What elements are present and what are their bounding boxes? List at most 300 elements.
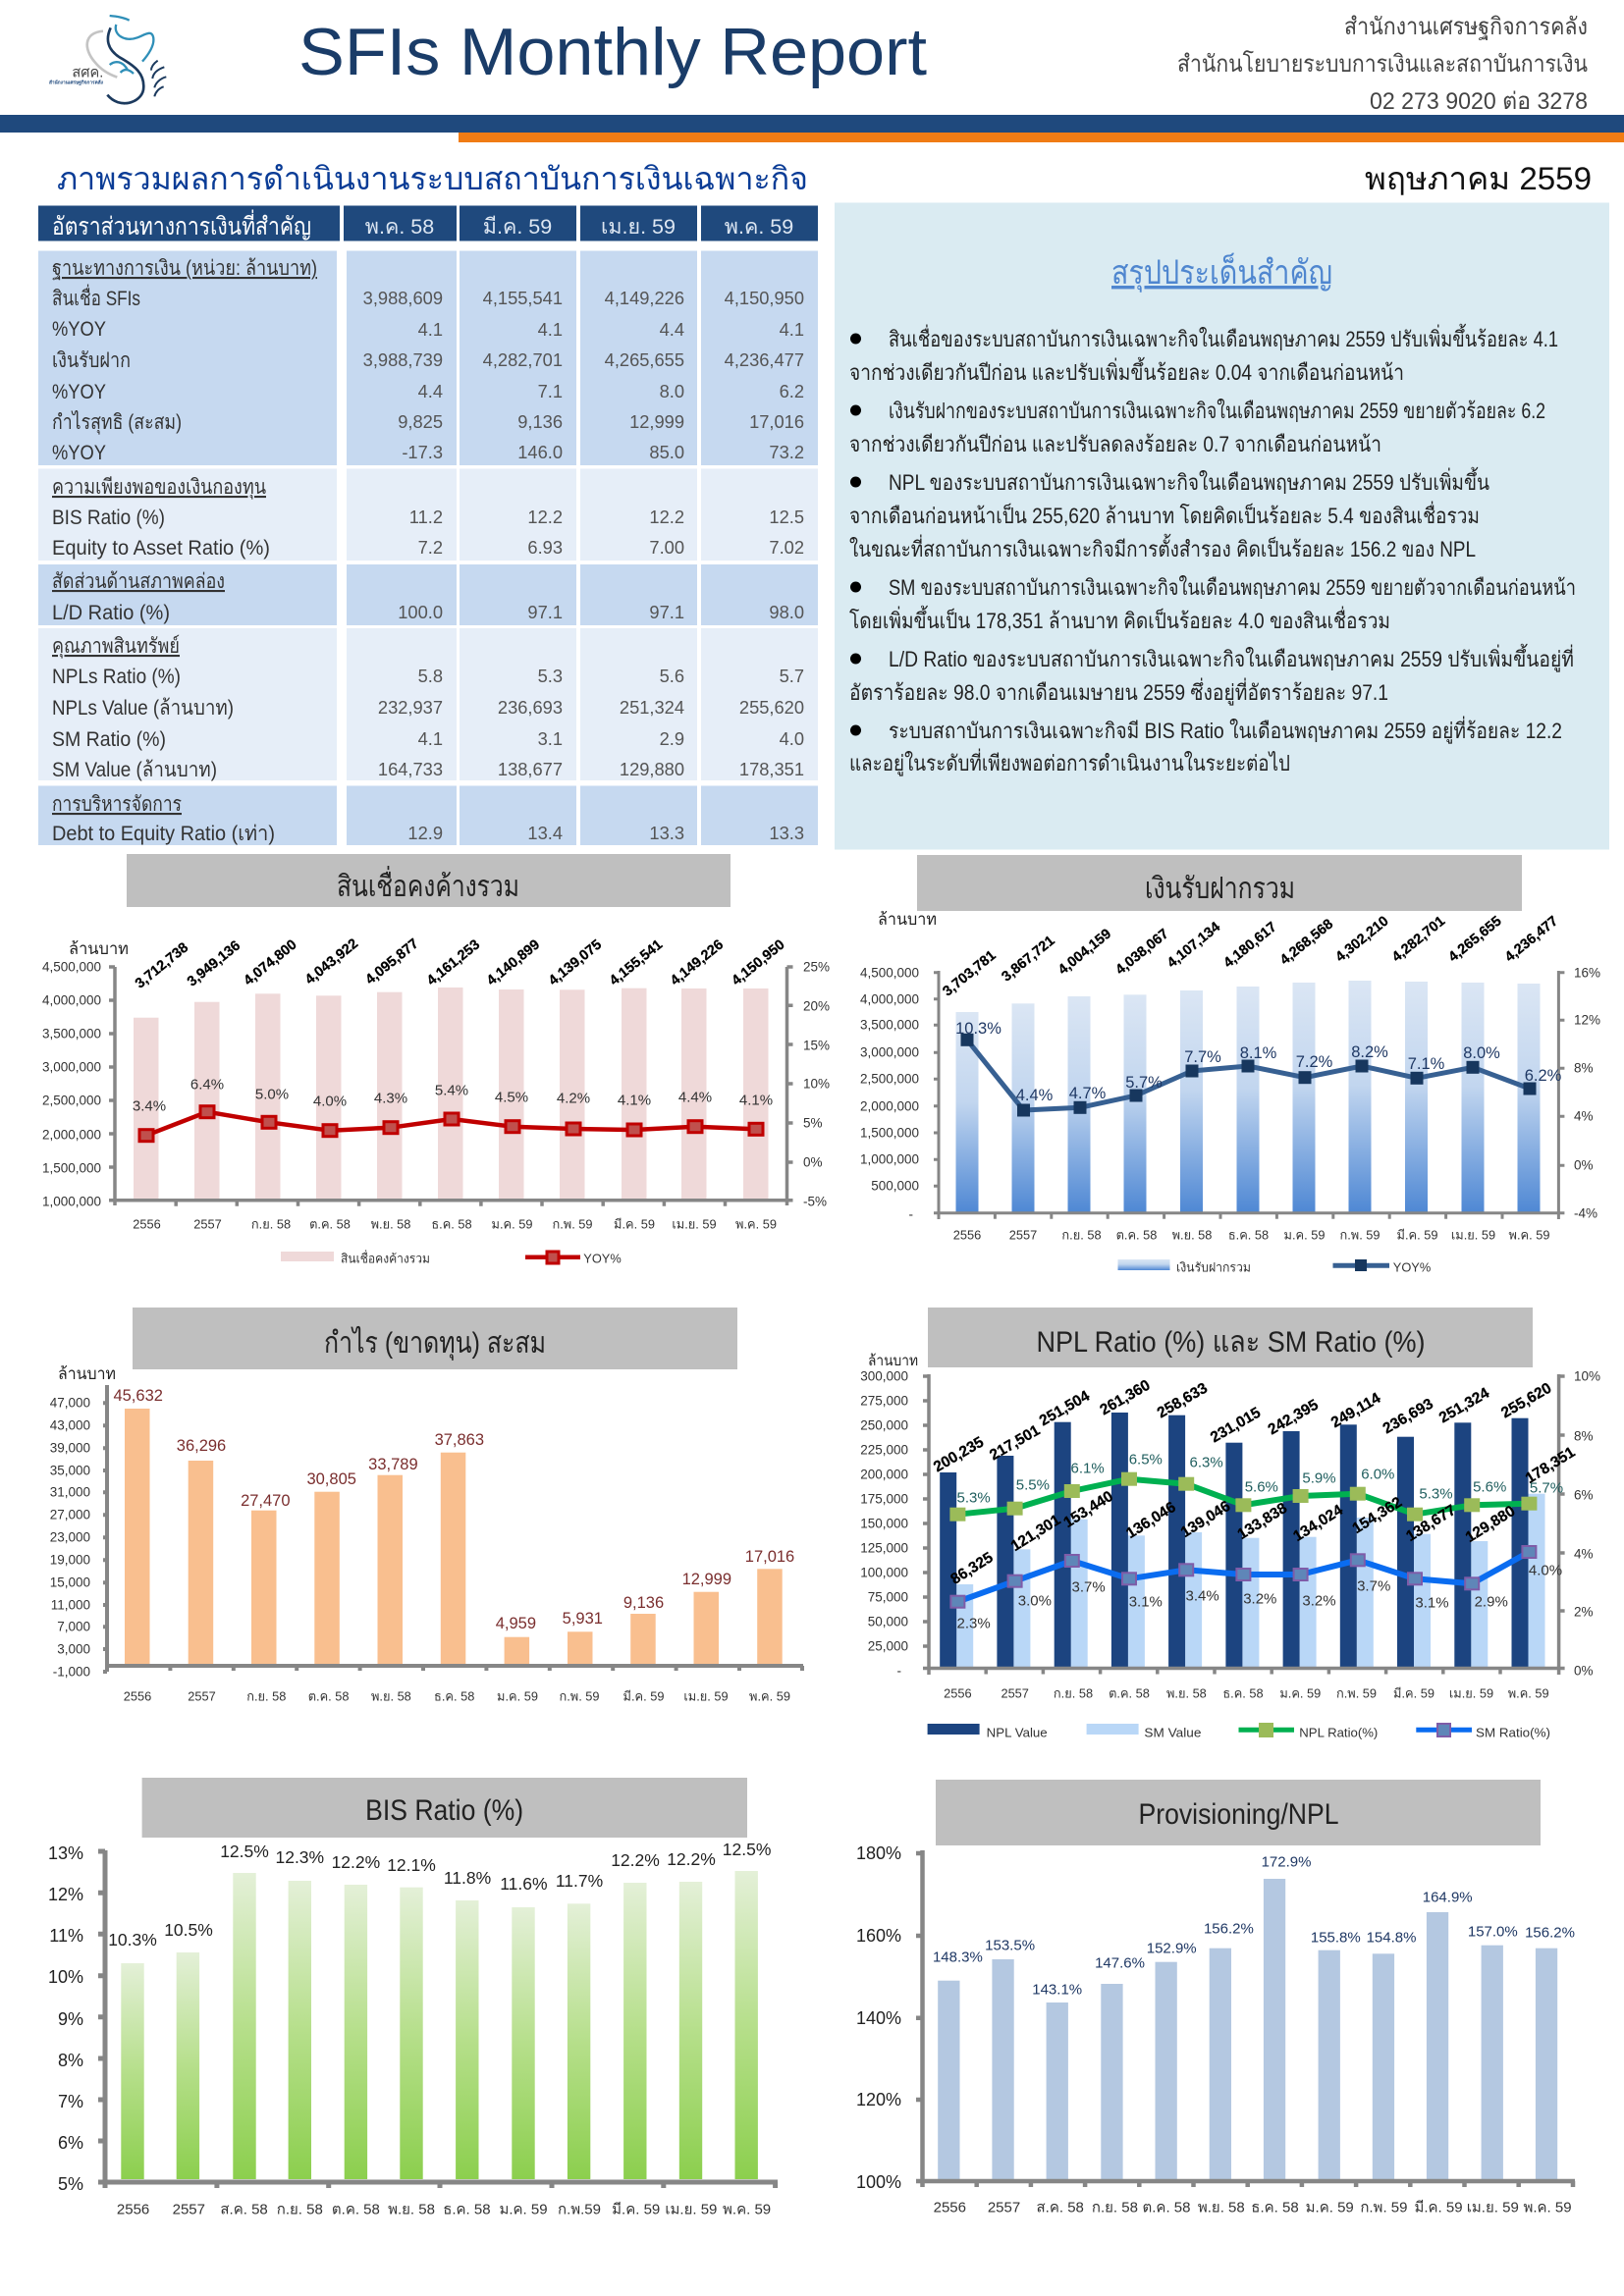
right axis labels	[803, 960, 830, 1209]
NPL ratio labels: 5.3%	[1419, 1486, 1453, 1502]
table group: financial position: 9,136	[517, 411, 563, 432]
table group: asset quality: NPLs Value (ล้านบาท)	[52, 697, 234, 720]
y axis labels: 47,000	[50, 1396, 90, 1410]
YOY data labels: 8.0%	[1463, 1044, 1500, 1062]
y axis labels: 180%	[856, 1843, 901, 1863]
organisation contact text: 02 273 9020 ต่อ 3278	[1370, 88, 1588, 115]
chart heading	[127, 854, 731, 907]
summary text lines: อัตราร้อยละ 98.0 จากเดือนเมษายน 2559 ซึ่งอยู่ที่อัตราร้อยละ 97.1	[849, 677, 1388, 706]
data labels: 156.2%	[1525, 1924, 1575, 1942]
summary text lines: จากช่วงเดียวกันปีก่อน และปรับเพิ่มขึ้นร้อยละ 0.04 จากเดือนก่อนหน้า	[849, 357, 1404, 385]
left axis labels: 500,000	[871, 1178, 919, 1194]
x axis labels: พ.ย. 58	[371, 1217, 410, 1231]
x axis labels: พ.ค. 59	[749, 1688, 790, 1704]
left axis labels: 150,000	[860, 1516, 908, 1531]
y axis labels: 3,000	[57, 1641, 90, 1657]
x axis labels: 2557	[1009, 1227, 1037, 1243]
data labels: 12.1%	[387, 1855, 436, 1875]
y axis labels	[50, 1396, 90, 1679]
axes	[103, 1385, 803, 1672]
deposit value labels: 3,867,721	[999, 933, 1058, 986]
y axis labels: 31,000	[50, 1484, 90, 1500]
data labels: 12.5%	[723, 1840, 771, 1859]
y axis labels: 9%	[58, 2009, 83, 2029]
SM ratio labels: 3.2%	[1243, 1590, 1276, 1608]
deposit value labels	[940, 913, 1561, 1000]
table group: financial position: กำไรสุทธิ (สะสม)	[52, 410, 182, 435]
right axis labels: 16%	[1574, 966, 1600, 980]
x axis labels: เม.ย. 59	[1467, 2199, 1519, 2216]
table group: financial position: %YOY	[52, 442, 106, 464]
table header row: พ.ค. 59	[725, 215, 793, 239]
data labels: 156.2%	[1204, 1920, 1254, 1938]
table group: asset quality: 4.0	[780, 728, 804, 749]
table group: asset quality: SM Ratio (%)	[52, 728, 166, 751]
table group: financial position: 6.2	[780, 381, 804, 401]
table group: asset quality: คุณภาพสินทรัพย์	[52, 634, 180, 659]
y axis labels: 7,000	[57, 1620, 90, 1633]
data labels: 148.3%	[933, 1949, 983, 1965]
x axis labels: พ.ค. 59	[1508, 1686, 1549, 1700]
deposit value labels: 4,268,568	[1277, 916, 1336, 969]
header bars	[0, 115, 1624, 142]
table header row: พ.ค. 58	[365, 215, 434, 239]
data labels: 33,789	[368, 1456, 418, 1473]
summary text lines: จากช่วงเดียวกันปีก่อน และปรับลดลงร้อยละ 0.7 จากเดือนก่อนหน้า	[849, 432, 1381, 456]
x axis labels: พ.ค. 59	[1509, 1227, 1549, 1243]
YOY data labels: 5.7%	[1125, 1074, 1163, 1092]
table group: asset quality	[38, 628, 818, 781]
SM value labels: 139,046	[1178, 1498, 1234, 1541]
table group: financial position: -17.3	[402, 442, 443, 462]
right axis labels: 25%	[803, 960, 830, 974]
left axis labels: 250,000	[860, 1417, 908, 1433]
x axis labels: พ.ย. 58	[1172, 1227, 1212, 1243]
table group: financial position: 12,999	[629, 411, 684, 432]
NPL value labels: 251,504	[1037, 1387, 1093, 1429]
loan value labels: 4,043,922	[302, 935, 361, 988]
NPL ratio labels: 6.1%	[1070, 1461, 1105, 1476]
table header row: มี.ค. 59	[483, 215, 552, 239]
table group: liquidity	[38, 564, 818, 625]
table group: liquidity: L/D Ratio (%)	[52, 602, 170, 624]
table header row	[38, 206, 818, 241]
table group: financial position: 4,282,701	[483, 349, 563, 370]
legend: SM Value	[1144, 1726, 1201, 1739]
panel: total deposits chart	[860, 855, 1600, 1274]
data labels: 11.7%	[556, 1871, 603, 1891]
right axis labels: -5%	[803, 1194, 827, 1209]
x axis labels: ธ.ค. 58	[1228, 1227, 1269, 1243]
table group: asset quality: 5.3	[538, 666, 563, 686]
data labels: 152.9%	[1147, 1940, 1197, 1957]
summary text lines: โดยเพิ่มขึ้นเป็น 178,351 ล้านบาท คิดเป็นร้อยละ 4.0 ของสินเชื่อรวม	[849, 606, 1390, 633]
data labels: 12.2%	[667, 1849, 716, 1869]
SM ratio labels: 3.1%	[1129, 1594, 1163, 1610]
left axis labels: 175,000	[860, 1492, 908, 1506]
axes	[98, 1850, 778, 2188]
table group: financial position: 4,149,226	[605, 288, 684, 308]
table group: financial position: 4.1	[418, 319, 443, 340]
NPL value labels: 200,235	[931, 1433, 987, 1475]
SM value labels: 153,440	[1060, 1488, 1116, 1531]
right axis labels: 8%	[1574, 1060, 1594, 1076]
y axis labels: 23,000	[50, 1529, 90, 1545]
x axis labels: ต.ค. 58	[332, 2201, 380, 2218]
right axis labels: 10%	[1574, 1368, 1600, 1384]
table group: financial position: 146.0	[517, 442, 563, 462]
table group: capital adequacy: 7.02	[769, 537, 804, 558]
left axis labels: 200,000	[860, 1467, 908, 1482]
SM ratio labels: 3.7%	[1357, 1578, 1390, 1594]
table group: liquidity: 97.1	[527, 602, 563, 622]
table group: financial position: 4.4	[418, 381, 443, 401]
table group: financial position: 7.1	[538, 381, 563, 401]
table group: asset quality: 164,733	[378, 759, 443, 779]
y axis labels: 13%	[48, 1843, 83, 1863]
y axis labels: 27,000	[50, 1508, 90, 1522]
data labels: 37,863	[435, 1431, 484, 1449]
left axis labels: 4,500,000	[42, 960, 101, 974]
table group: asset quality: 5.8	[418, 666, 443, 686]
table group: financial position: 3,988,739	[363, 349, 443, 370]
chart heading	[142, 1778, 747, 1838]
x axis labels: ก.ย. 58	[277, 2201, 323, 2218]
table group: asset quality: 4.1	[418, 728, 443, 749]
y axis labels: -1,000	[53, 1665, 90, 1679]
left axis labels: 25,000	[868, 1639, 908, 1653]
SM value labels: 133,838	[1235, 1500, 1290, 1543]
x axis labels: ธ.ค. 58	[1251, 2199, 1299, 2216]
YOY data labels: 4.5%	[495, 1090, 528, 1105]
left axis labels: -	[897, 1663, 901, 1679]
x axis labels: พ.ค. 59	[723, 2201, 771, 2218]
SM value labels: 134,024	[1290, 1502, 1346, 1545]
deposit value labels: 3,703,781	[940, 947, 1000, 1000]
YOY data labels: 4.2%	[557, 1090, 590, 1107]
SM value labels: 138,677	[1403, 1502, 1459, 1545]
YOY data labels	[133, 1076, 773, 1115]
NPL ratio labels: 5.9%	[1302, 1470, 1336, 1486]
x axis labels: ต.ค. 58	[308, 1688, 349, 1704]
right axis labels: 8%	[1574, 1429, 1594, 1443]
SM ratio line	[950, 1546, 1536, 1608]
deposit value labels: 4,038,067	[1112, 926, 1172, 979]
bars	[956, 981, 1540, 1212]
data labels: 27,470	[241, 1492, 291, 1510]
right axis labels	[1574, 1368, 1600, 1679]
YOY data labels: 4.4%	[1016, 1087, 1054, 1104]
loan value labels: 3,712,738	[133, 939, 191, 992]
data labels: 45,632	[113, 1387, 163, 1405]
table group: financial position	[38, 251, 818, 465]
SM ratio labels: 3.4%	[1185, 1588, 1219, 1604]
table group: financial position: 4,150,950	[725, 288, 804, 308]
x axis labels: ก.พ. 59	[559, 1688, 600, 1704]
left axis labels: 2,000,000	[860, 1099, 919, 1113]
table group: financial position: 85.0	[649, 442, 684, 462]
x axis labels: เม.ย. 59	[1451, 1227, 1495, 1243]
table group: capital adequacy: Equity to Asset Ratio (%)	[52, 537, 270, 560]
x axis labels: 2556	[133, 1217, 161, 1231]
unit label: ล้านบาท	[69, 939, 129, 958]
x axis labels	[133, 1217, 777, 1231]
legend	[281, 1251, 622, 1266]
y axis labels: 100%	[856, 2172, 901, 2192]
y axis labels: 6%	[58, 2133, 83, 2153]
summary text lines: ในขณะที่สถาบันการเงินเฉพาะกิจมีการตั้งสำรอง คิดเป็นร้อยละ 156.2 ของ NPL	[849, 534, 1476, 561]
y axis labels: 11,000	[51, 1598, 90, 1612]
deposit value labels: 4,180,617	[1220, 919, 1280, 972]
x axis labels: ก.ย. 58	[1054, 1686, 1093, 1700]
left axis labels: 4,000,000	[42, 993, 101, 1007]
x axis labels: เม.ย. 59	[672, 1217, 717, 1231]
table group: financial position: %YOY	[52, 381, 106, 403]
NPL ratio labels: 6.5%	[1129, 1451, 1163, 1468]
y axis labels	[48, 1843, 83, 2194]
NPL value labels: 255,620	[1498, 1380, 1554, 1421]
x axis labels: ธ.ค. 58	[443, 2201, 491, 2218]
table group: capital adequacy: 7.2	[418, 537, 443, 558]
x axis labels: มี.ค. 59	[623, 1688, 664, 1704]
light SM bars	[956, 1494, 1545, 1667]
right axis labels: 15%	[803, 1039, 830, 1052]
panel: key points summary	[835, 202, 1609, 850]
right axis labels: 4%	[1574, 1547, 1594, 1561]
table header row: เม.ย. 59	[601, 215, 676, 239]
table group: asset quality: NPLs Ratio (%)	[52, 666, 181, 688]
SM value labels	[947, 1444, 1579, 1588]
x axis labels: ธ.ค. 58	[1222, 1686, 1264, 1700]
YOY line	[139, 1106, 763, 1142]
x axis labels: ธ.ค. 58	[434, 1688, 474, 1704]
YOY data labels: 3.4%	[133, 1097, 166, 1115]
YOY data labels: 8.1%	[1240, 1044, 1277, 1062]
YOY data labels	[955, 1020, 1562, 1104]
x axis labels: ม.ค. 59	[1306, 2199, 1354, 2216]
x axis labels: 2557	[173, 2201, 205, 2218]
deposit value labels: 4,282,701	[1389, 913, 1448, 966]
left axis labels: 2,500,000	[42, 1094, 101, 1107]
table group: capital adequacy	[38, 469, 818, 561]
data labels: 143.1%	[1032, 1981, 1082, 1999]
left axis labels: 275,000	[860, 1394, 908, 1408]
y axis labels: 160%	[856, 1926, 901, 1946]
SM value labels: 86,325	[947, 1549, 997, 1588]
SM value labels: 121,301	[1008, 1512, 1064, 1555]
x axis labels: 2556	[117, 2201, 149, 2218]
legend: SM Ratio(%)	[1476, 1726, 1550, 1739]
right axis labels: 5%	[803, 1115, 823, 1131]
left axis labels: 1,000,000	[42, 1194, 101, 1209]
x axis labels: พ.ย. 58	[388, 2201, 435, 2218]
table group: management: 13.4	[527, 823, 563, 843]
organisation contact text	[1177, 14, 1588, 115]
x axis labels: พ.ย. 58	[1198, 2199, 1245, 2216]
chart heading	[928, 1308, 1533, 1367]
table group: asset quality: 232,937	[378, 697, 443, 718]
unit label: ล้านบาท	[878, 910, 937, 929]
loan value labels: 4,074,800	[241, 936, 300, 989]
loan value labels: 4,150,950	[729, 936, 788, 989]
table group: financial position: 4,155,541	[483, 288, 563, 308]
table group: financial position: สินเชื่อ SFIs	[52, 284, 140, 310]
right axis labels: 12%	[1574, 1013, 1600, 1027]
chart heading	[936, 1780, 1541, 1845]
data labels	[933, 1853, 1575, 1999]
x axis labels: ส.ค. 58	[1037, 2199, 1084, 2216]
summary text lines	[849, 324, 1576, 776]
month label: พฤษภาคม 2559	[1365, 161, 1592, 196]
NPL ratio labels: 6.3%	[1189, 1455, 1223, 1470]
x axis labels: ก.ย. 58	[251, 1217, 291, 1231]
table group: capital adequacy: 12.2	[649, 507, 684, 527]
loan value labels: 4,161,253	[424, 936, 483, 989]
table group: financial position: 73.2	[769, 442, 804, 462]
x axis labels	[934, 2199, 1572, 2216]
legend: NPL Ratio(%)	[1299, 1726, 1378, 1739]
x axis labels: เม.ย. 59	[665, 2201, 717, 2218]
left axis labels: 1,500,000	[42, 1160, 101, 1176]
bars	[134, 988, 768, 1201]
x axis labels: ก.พ. 59	[1336, 1686, 1377, 1700]
x axis labels: ก.พ. 59	[552, 1217, 593, 1231]
y axis labels: 120%	[856, 2090, 901, 2109]
chart heading: Provisioning/NPL	[1139, 1798, 1339, 1831]
left axis labels: 1,500,000	[860, 1125, 919, 1141]
y axis labels: 7%	[58, 2092, 83, 2111]
left axis labels: 1,000,000	[860, 1152, 919, 1166]
y axis labels: 10%	[48, 1967, 83, 1987]
left axis labels: 225,000	[860, 1443, 908, 1457]
chart heading	[133, 1308, 737, 1369]
SM ratio labels: 3.0%	[1018, 1592, 1052, 1610]
NPL value labels: 242,395	[1266, 1396, 1322, 1438]
table group: financial position: ฐานะทางการเงิน (หน่วย: ล้านบาท)	[52, 257, 317, 280]
x axis labels: มี.ค. 59	[1393, 1686, 1435, 1700]
x axis labels	[117, 2201, 771, 2218]
x axis labels: ส.ค. 58	[220, 2201, 268, 2218]
x axis labels	[953, 1227, 1549, 1243]
right axis labels: 0%	[1574, 1158, 1594, 1172]
table group: financial position: 3,988,609	[363, 288, 443, 308]
right axis labels: -4%	[1574, 1205, 1597, 1221]
deposit value labels: 4,236,477	[1502, 913, 1561, 966]
table: key financial ratios	[38, 206, 818, 845]
SM ratio labels: 2.3%	[956, 1616, 991, 1631]
panel: outstanding loans chart	[42, 854, 830, 1266]
y axis labels: 140%	[856, 2008, 901, 2028]
axes	[916, 1850, 1575, 2187]
SM ratio labels: 3.7%	[1071, 1578, 1106, 1596]
dark NPL bars	[940, 1413, 1528, 1667]
x axis labels	[944, 1686, 1549, 1700]
x axis labels: 2556	[124, 1688, 151, 1704]
data labels: 12,999	[682, 1571, 731, 1588]
panel: NPL and SM ratio chart	[860, 1308, 1600, 1739]
YOY data labels: 7.1%	[1408, 1055, 1445, 1073]
axes	[109, 967, 793, 1206]
left axis labels	[860, 966, 919, 1221]
SM ratio labels	[956, 1563, 1562, 1631]
logo: สำนักงานเศรษฐกิจการคลัง	[49, 79, 104, 85]
data labels: 12.2%	[332, 1852, 380, 1872]
data labels: 9,136	[623, 1594, 664, 1612]
table group: capital adequacy: 11.2	[409, 507, 443, 527]
x axis labels: 2557	[988, 2199, 1020, 2216]
x axis labels: พ.ย. 58	[371, 1688, 411, 1704]
data labels: 10.5%	[164, 1920, 213, 1940]
chart heading: กำไร (ขาดทุน) สะสม	[324, 1325, 546, 1362]
table group: asset quality: 178,351	[739, 759, 804, 779]
table group: management: 13.3	[649, 823, 684, 843]
summary heading: สรุปประเด็นสำคัญ	[1111, 252, 1332, 293]
bullets	[850, 334, 861, 736]
table group: capital adequacy: BIS Ratio (%)	[52, 507, 165, 529]
YOY data labels: 4.1%	[739, 1092, 773, 1109]
table group: liquidity: 97.1	[649, 602, 684, 622]
NPL value labels: 217,501	[987, 1421, 1044, 1464]
SM ratio labels: 3.1%	[1415, 1594, 1449, 1612]
table group: liquidity: 98.0	[769, 602, 804, 622]
data labels: 147.6%	[1095, 1955, 1145, 1971]
table group: asset quality: 3.1	[538, 728, 563, 749]
table group: capital adequacy: 12.2	[527, 507, 563, 527]
table group: liquidity: สัดส่วนด้านสภาพคล่อง	[52, 570, 225, 593]
logo: สศค.	[72, 65, 103, 81]
NPL value labels: 236,693	[1380, 1395, 1436, 1437]
SM ratio labels: 3.2%	[1302, 1592, 1336, 1610]
left axis labels: 4,500,000	[860, 966, 919, 980]
y axis labels: 12%	[48, 1885, 83, 1904]
right axis labels: 20%	[803, 999, 830, 1013]
NPL value labels: 249,114	[1328, 1390, 1383, 1431]
table group: financial position: 17,016	[749, 411, 804, 432]
left axis labels: 50,000	[868, 1614, 908, 1629]
data labels: 157.0%	[1468, 1924, 1518, 1940]
loan value labels: 4,149,226	[668, 936, 727, 989]
x axis labels: ม.ค. 59	[499, 2201, 548, 2218]
YOY data labels: 6.4%	[190, 1076, 224, 1094]
x axis labels: ก.ย. 58	[246, 1688, 286, 1704]
SM value labels: 129,880	[1463, 1503, 1518, 1546]
y axis labels: 11%	[49, 1926, 83, 1946]
right axis labels: 2%	[1574, 1604, 1594, 1620]
x axis labels: มี.ค. 59	[612, 2201, 660, 2218]
table group: asset quality: 5.7	[780, 666, 804, 686]
data labels: 12.3%	[275, 1847, 324, 1867]
table group: financial position: 4.4	[660, 319, 684, 340]
YOY data labels: 8.2%	[1351, 1043, 1388, 1061]
legend	[928, 1723, 1550, 1739]
left axis labels	[860, 1368, 908, 1679]
table group: capital adequacy: 6.93	[527, 537, 563, 558]
data labels: 11.8%	[444, 1868, 491, 1888]
table group: liquidity: 100.0	[398, 602, 443, 622]
table group: asset quality: 138,677	[498, 759, 563, 779]
deposit value labels: 4,265,655	[1445, 913, 1505, 966]
table group: management: 13.3	[769, 823, 804, 843]
section heading: ภาพรวมผลการดำเนินงานระบบสถาบันการเงินเฉพาะกิจ	[57, 161, 808, 196]
loan value labels: 3,949,136	[185, 937, 244, 990]
left axis labels: 300,000	[860, 1368, 908, 1384]
unit label: ล้านบาท	[868, 1353, 918, 1369]
left axis labels: 2,000,000	[42, 1127, 101, 1143]
axes	[934, 971, 1564, 1219]
NPL value labels: 251,324	[1436, 1384, 1492, 1426]
bars	[938, 1879, 1557, 2180]
YOY data labels: 6.2%	[1525, 1067, 1562, 1085]
